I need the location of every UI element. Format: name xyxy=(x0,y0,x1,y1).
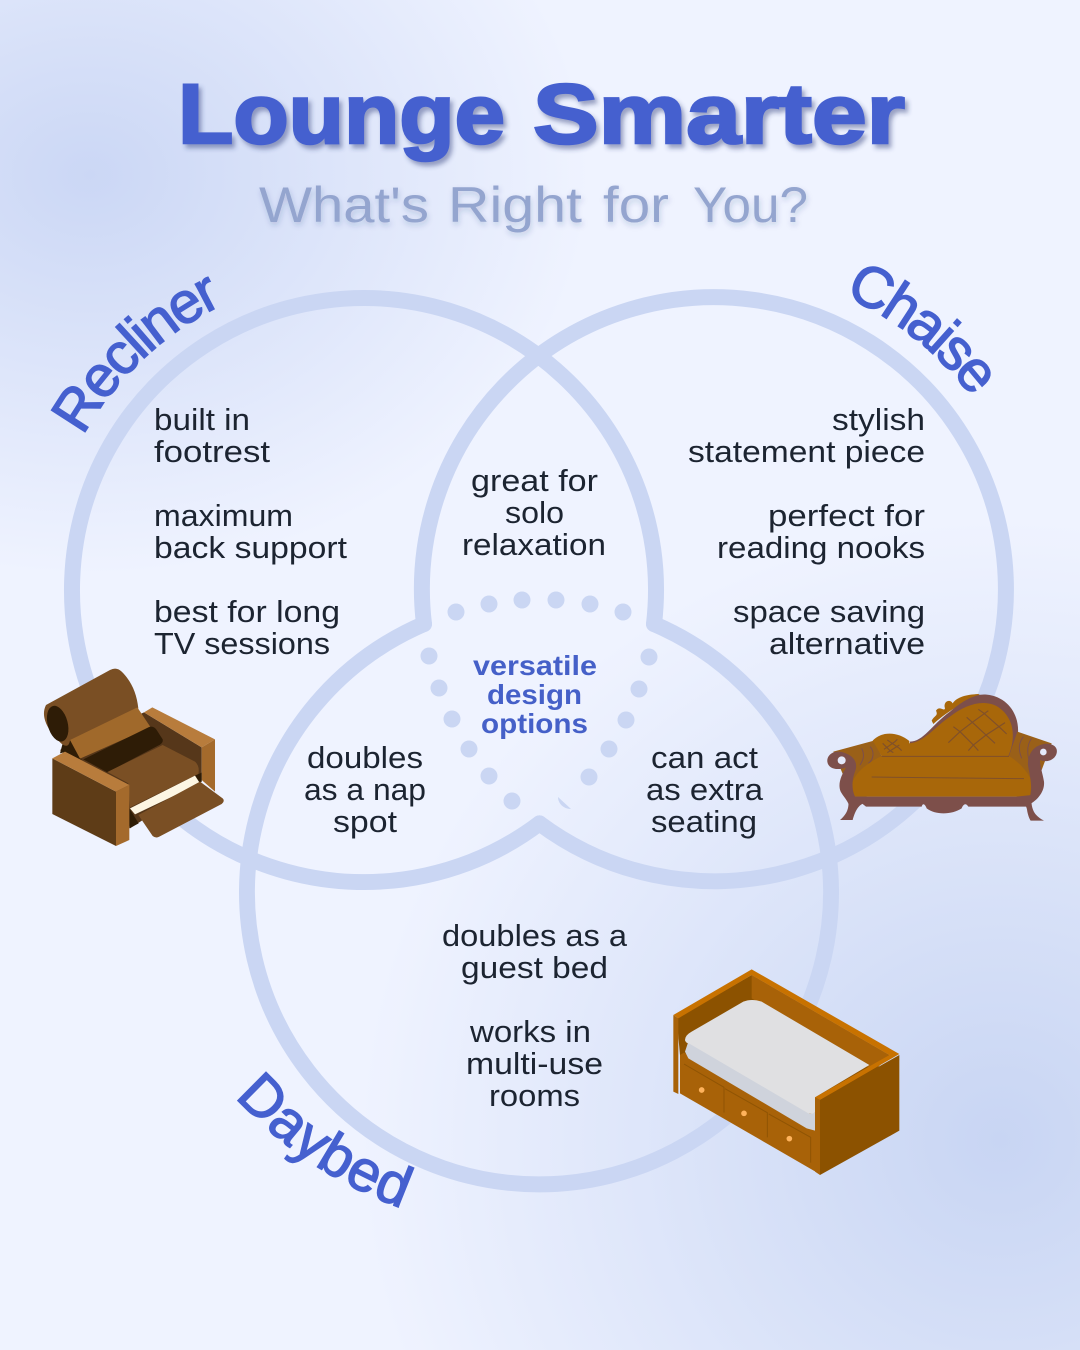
text: recliner features: maximum xyxy=(154,498,293,533)
text: daybed features: rooms xyxy=(489,1078,580,1113)
icon: chaise xyxy=(827,694,1057,821)
circle: daybed xyxy=(247,624,831,1184)
text: daybed features: works in xyxy=(469,1014,591,1049)
subtitle: What's xyxy=(259,177,429,233)
subtitle: for xyxy=(603,177,669,233)
label: Chaise: Chaise xyxy=(852,266,991,392)
text: recliner and chaise overlap xyxy=(462,463,606,562)
title xyxy=(178,67,905,161)
text: chaise features: alternative xyxy=(769,626,925,661)
text: recliner and daybed overlap: doubles xyxy=(307,740,423,775)
text: recliner features: footrest xyxy=(154,434,270,469)
text: recliner and chaise overlap: great for xyxy=(471,463,598,498)
label: Daybed: Daybed xyxy=(236,1071,414,1208)
text: daybed features xyxy=(442,918,628,1113)
circle: chaise xyxy=(422,297,1006,881)
text: recliner features: best for long xyxy=(154,594,340,629)
text: daybed features: guest bed xyxy=(461,950,608,985)
text: chaise features: stylish xyxy=(832,402,925,437)
text: centre overlap xyxy=(473,650,597,739)
text: chaise features xyxy=(688,402,925,661)
subtitle xyxy=(259,177,808,233)
text: chaise features: perfect for xyxy=(768,498,925,533)
icon: recliner xyxy=(43,669,224,846)
dotted centre outline xyxy=(420,592,658,810)
icon: daybed xyxy=(673,969,899,1175)
text: recliner and daybed overlap xyxy=(304,740,426,839)
circle: recliner xyxy=(72,298,656,882)
text: recliner features: TV sessions xyxy=(154,626,330,661)
text: centre overlap: design xyxy=(487,679,582,710)
text: recliner and daybed overlap: spot xyxy=(333,804,397,839)
title: Smarter xyxy=(533,67,905,161)
text: chaise features: reading nooks xyxy=(717,530,925,565)
title: Lounge xyxy=(178,67,505,161)
text: recliner and chaise overlap: relaxation xyxy=(462,527,606,562)
text: recliner and chaise overlap: solo xyxy=(505,495,564,530)
text: recliner features xyxy=(154,402,347,661)
text: daybed features: multi-use xyxy=(466,1046,603,1081)
text: recliner features: built in xyxy=(154,402,250,437)
text: chaise features: statement piece xyxy=(688,434,925,469)
text: chaise and daybed overlap: seating xyxy=(651,804,757,839)
venn diagram circles xyxy=(72,297,1006,1184)
text: centre overlap: versatile xyxy=(473,650,597,681)
label: Recliner: Recliner xyxy=(50,276,215,433)
text: chaise and daybed overlap: as extra xyxy=(646,772,764,807)
text: recliner features: back support xyxy=(154,530,347,565)
text: chaise and daybed overlap: can act xyxy=(651,740,758,775)
text: daybed features: doubles as a xyxy=(442,918,628,953)
subtitle: Right xyxy=(448,177,582,233)
subtitle: You? xyxy=(693,177,808,233)
text: chaise features: space saving xyxy=(733,594,925,629)
text: chaise and daybed overlap xyxy=(646,740,764,839)
text: centre overlap: options xyxy=(481,708,588,739)
text: recliner and daybed overlap: as a nap xyxy=(304,772,426,807)
